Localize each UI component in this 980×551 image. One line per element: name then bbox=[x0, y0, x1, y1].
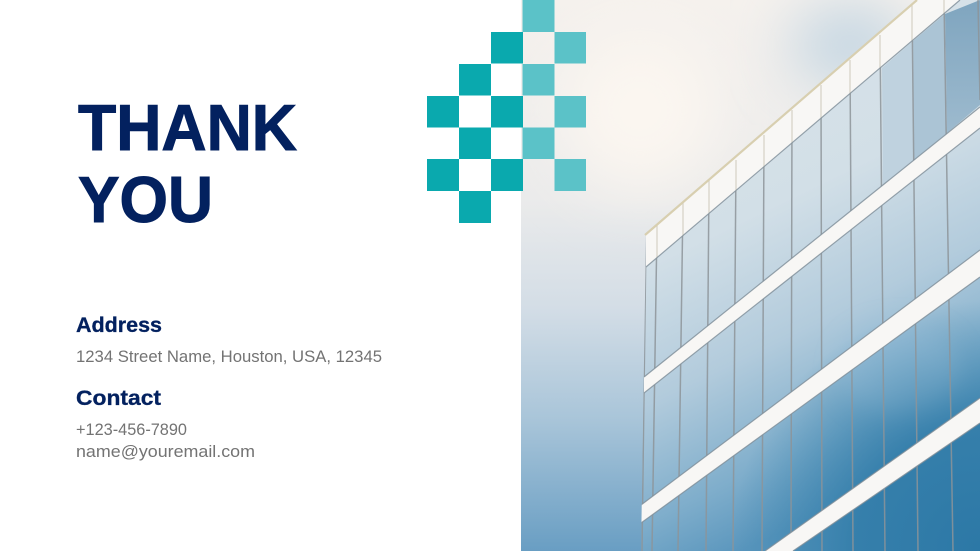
building facade bbox=[640, 0, 980, 551]
band edge shadows bbox=[641, 0, 980, 551]
photo: glass office building against the sky bbox=[521, 0, 980, 551]
address heading: Address bbox=[76, 314, 162, 337]
white floor bands bbox=[641, 0, 980, 551]
glass panes bbox=[640, 0, 980, 551]
reflections bbox=[757, 0, 980, 551]
address text: 1234 Street Name, Houston, USA, 12345 bbox=[76, 347, 382, 366]
sky bbox=[521, 0, 915, 551]
title: YOU bbox=[78, 163, 213, 236]
address block bbox=[76, 314, 382, 366]
title bbox=[78, 91, 297, 236]
phone: +123-456-7890 bbox=[76, 420, 187, 439]
roof edge bbox=[645, 0, 917, 235]
title: THANK bbox=[78, 91, 297, 164]
mullions over bands bbox=[657, 0, 944, 258]
checker pattern: teal squares bbox=[427, 0, 586, 223]
contact block bbox=[76, 387, 255, 461]
email: name@youremail.com bbox=[76, 442, 255, 461]
solid teal squares on white bbox=[427, 32, 523, 223]
mullions bbox=[642, 0, 980, 551]
contact heading: Contact bbox=[76, 387, 161, 410]
translucent teal squares on photo bbox=[522, 0, 586, 191]
